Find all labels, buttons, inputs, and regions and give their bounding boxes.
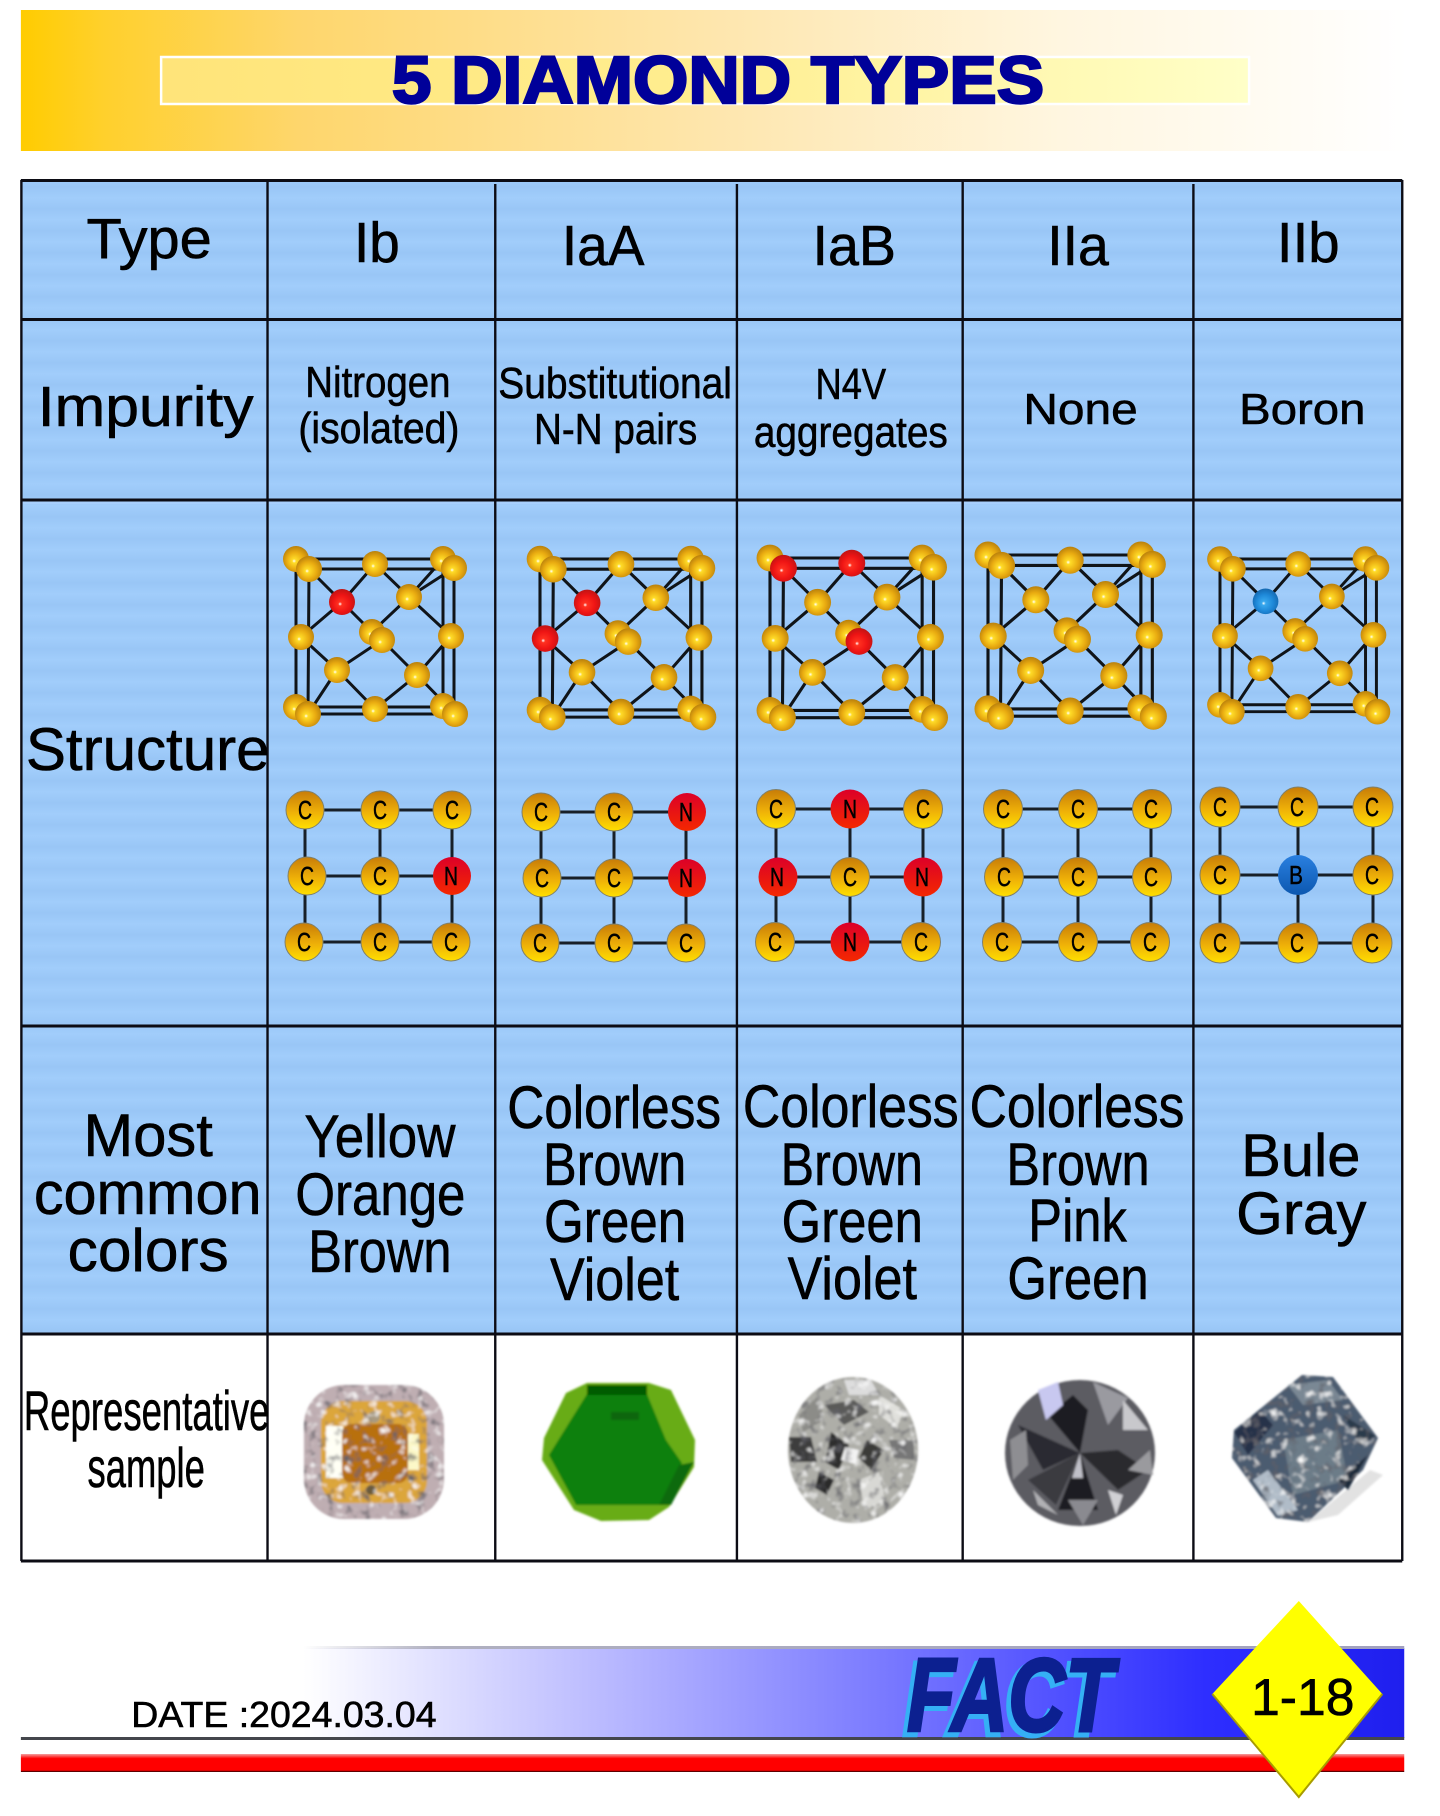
row: most common colors: Brown — [781, 1131, 923, 1198]
lattice: type Ib: C — [373, 861, 387, 891]
lattice: type IIb: C — [1290, 928, 1304, 958]
table grid — [21, 180, 1402, 1561]
row: most common colors: Most — [84, 1102, 213, 1169]
lattice: type IaA: C — [535, 863, 549, 893]
row: impurity: Substitutional — [498, 359, 732, 408]
row label: representative sample: Representative — [24, 1379, 270, 1442]
row: impurity: N-N pairs — [534, 405, 697, 454]
row: most common colors: Pink — [1028, 1187, 1127, 1254]
cube: type IaA — [527, 546, 716, 730]
sample: gray oval diamond — [788, 1377, 918, 1523]
lattice: type Ib: C — [373, 927, 387, 957]
row: most common colors: Brown — [1006, 1131, 1150, 1198]
lattice: type IIa: C — [1071, 862, 1085, 892]
row: most common colors: Colorless — [970, 1073, 1184, 1140]
lattice: type Ib: N — [444, 861, 458, 891]
row: impurity: N4V — [815, 360, 887, 409]
lattice: type IaA: C — [679, 928, 693, 958]
sample: green diamond — [542, 1383, 695, 1521]
lattice: type Ib: C — [445, 795, 459, 825]
lattice: type IIa: C — [1071, 794, 1085, 824]
sample: dark round diamond — [1005, 1380, 1155, 1526]
row: most common colors: Colorless — [743, 1073, 959, 1140]
lattice: type IIa: C — [1143, 927, 1157, 957]
row: impurity: aggregates — [754, 408, 948, 457]
lattice: type IaA: C — [607, 928, 621, 958]
lattice: type IaB: C — [769, 794, 783, 824]
row: most common colors: Orange — [295, 1161, 465, 1228]
lattice: type Ib: C — [298, 795, 312, 825]
lattice: type IaB — [756, 790, 942, 962]
lattice: type IaB: C — [914, 927, 928, 957]
lattice: type Ib: C — [444, 927, 458, 957]
lattice: type IaA — [521, 793, 706, 962]
row: impurity: Boron — [1239, 385, 1365, 434]
title box — [161, 57, 1249, 104]
row: type — [87, 208, 1340, 278]
page number diamond — [1212, 1601, 1382, 1797]
sample: blue-gray cushion diamond — [1232, 1375, 1383, 1522]
lattice: type Ib: C — [300, 861, 314, 891]
row: most common colors — [34, 1073, 1367, 1313]
row: impurity: Impurity — [38, 376, 254, 439]
lattice: type IaB: N — [843, 794, 857, 824]
row: most common colors: Yellow — [304, 1103, 456, 1170]
lattice: type IIb — [1200, 787, 1393, 963]
row: most common colors: common — [34, 1160, 262, 1227]
row: type: Type — [87, 208, 212, 271]
FACT logo: FACT — [907, 1637, 1120, 1753]
lattice: type IIa: C — [1144, 794, 1158, 824]
lattice: type IIa: C — [996, 794, 1010, 824]
row: most common colors: Violet — [550, 1246, 680, 1313]
lattice: type IIa — [982, 790, 1172, 962]
lattice: type Ib: C — [297, 927, 311, 957]
cube: type IIb — [1207, 546, 1390, 724]
lattice: type IaA: N — [679, 863, 693, 893]
lattice: type IaA: C — [534, 797, 548, 827]
row: impurity: Nitrogen — [305, 358, 451, 407]
lattice: type IIa: C — [995, 927, 1009, 957]
lattice: type IIa: C — [1144, 862, 1158, 892]
cube: type IIa — [974, 541, 1167, 730]
lattice: type IaA: C — [607, 797, 621, 827]
row: most common colors: Bule — [1241, 1122, 1360, 1189]
row: type: IIb — [1277, 212, 1340, 275]
cube: type Ib — [283, 546, 468, 727]
row: most common colors: Green — [1007, 1245, 1149, 1312]
sample: yellow ring diamond — [304, 1385, 444, 1519]
lattice: type IIb: C — [1213, 860, 1227, 890]
footer band — [21, 1646, 1404, 1772]
row: most common colors: Green — [544, 1188, 686, 1255]
lattice: type IIb: C — [1365, 792, 1379, 822]
row label: representative sample: sample — [88, 1436, 205, 1499]
row: most common colors: Green — [782, 1188, 923, 1255]
lattice: type IaB: N — [915, 862, 929, 892]
lattice: type IIb: C — [1290, 792, 1304, 822]
row: most common colors: Colorless — [507, 1074, 721, 1141]
cube: type IaB — [757, 545, 948, 731]
lattice: type IIa: C — [1071, 927, 1085, 957]
title: 5 DIAMOND TYPES — [392, 44, 1044, 118]
title banner — [21, 10, 1407, 151]
row label: representative sample — [24, 1379, 270, 1499]
row: most common colors: colors — [68, 1217, 229, 1284]
lattice: type IIb: C — [1213, 792, 1227, 822]
lattice: type IIb: C — [1365, 928, 1379, 958]
lattice: type Ib — [285, 791, 471, 961]
row: impurity: (isolated) — [298, 404, 459, 453]
lattice: type IaB: N — [770, 862, 784, 892]
lattice: type IaB: C — [843, 862, 857, 892]
red stripe — [21, 1754, 1404, 1772]
FACT logo: FACT — [903, 1641, 1116, 1757]
lattice: type IaA: C — [607, 863, 621, 893]
row: impurity — [38, 358, 1365, 457]
row: most common colors: Brown — [308, 1218, 452, 1285]
lattice: type IaA: N — [679, 797, 693, 827]
lattice: type IaB: C — [916, 794, 930, 824]
lattice: type Ib: C — [373, 795, 387, 825]
lattice: type IIb: C — [1365, 860, 1379, 890]
row: type: Ib — [354, 212, 400, 275]
page number: 1-18 — [1251, 1668, 1355, 1726]
row: most common colors: Violet — [788, 1245, 917, 1312]
lattice: type IaB: C — [768, 927, 782, 957]
lattice: type IaB: N — [843, 927, 857, 957]
date: DATE :2024.03.04 — [131, 1695, 437, 1735]
lattice: type IIb: B — [1289, 860, 1303, 890]
row: type: IIa — [1047, 215, 1109, 278]
lattice: type IaA: C — [533, 928, 547, 958]
row: impurity: None — [1023, 385, 1138, 434]
lattice: type IIa: C — [997, 862, 1011, 892]
lattice: type IIb: C — [1213, 928, 1227, 958]
row: most common colors: Brown — [543, 1131, 686, 1198]
row: type: IaB — [813, 215, 896, 278]
row: type: IaA — [562, 215, 645, 278]
table background rows — [21, 181, 1402, 1561]
row label: structure: Structure — [26, 716, 270, 783]
row: most common colors: Gray — [1236, 1180, 1367, 1247]
